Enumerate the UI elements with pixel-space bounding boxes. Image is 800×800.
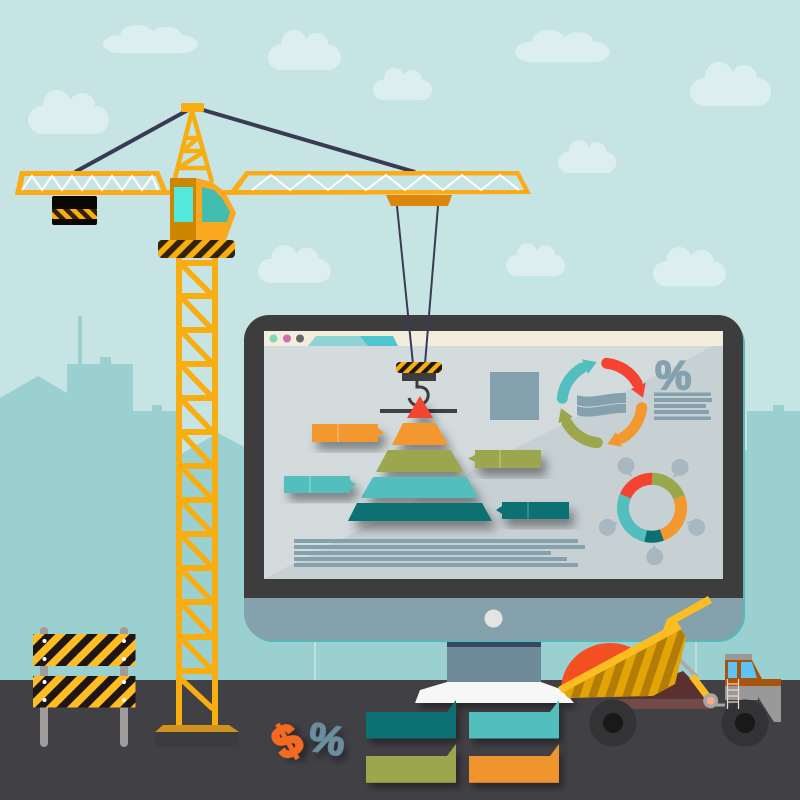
wave ribbons	[577, 393, 626, 417]
orange label	[312, 424, 384, 442]
ground	[0, 680, 800, 800]
crane platform	[158, 240, 235, 258]
dump bed	[563, 630, 686, 698]
hook block	[396, 362, 442, 405]
orange arrow	[607, 408, 642, 447]
crane support cables	[75, 110, 415, 172]
lifting bar	[380, 409, 457, 413]
donut chart	[623, 479, 681, 537]
crane mast	[176, 258, 218, 726]
screen	[264, 331, 723, 579]
teal card	[469, 700, 559, 738]
orange card	[469, 744, 559, 783]
clouds	[28, 25, 771, 286]
cab windows	[728, 662, 757, 678]
road barricade	[33, 627, 136, 747]
dark teal label	[496, 502, 569, 519]
olive card	[366, 744, 456, 783]
ladder	[727, 679, 739, 709]
browser tabs	[308, 336, 398, 346]
olive label	[468, 450, 541, 468]
dirt mound	[561, 643, 659, 690]
crane base	[155, 725, 239, 747]
thin light support lines	[315, 640, 696, 680]
hook trolley	[386, 195, 452, 206]
cab lower body	[725, 686, 781, 722]
pyramid chart	[348, 396, 492, 521]
dump truck	[558, 596, 781, 746]
teal arrow	[562, 359, 597, 398]
power button	[484, 610, 502, 628]
dollar sign: $	[263, 712, 311, 770]
speech bubbles	[599, 457, 705, 565]
browser title bar	[264, 331, 723, 346]
counterweight	[52, 196, 97, 225]
cab door window	[174, 187, 193, 222]
cab roof	[725, 654, 752, 660]
front wheel	[590, 700, 636, 746]
hydraulic arm	[680, 660, 725, 708]
window buttons	[270, 334, 304, 342]
rear wheel	[722, 700, 768, 746]
city skyline	[0, 316, 800, 680]
cab front window	[202, 187, 230, 222]
crane right jib	[220, 171, 531, 195]
red arrow	[607, 363, 646, 398]
percent text lines	[654, 392, 712, 420]
paragraph lines	[294, 539, 585, 567]
percent sign: %	[305, 713, 349, 765]
tower cap	[181, 103, 204, 112]
dark teal card	[366, 700, 456, 738]
monitor stand	[447, 640, 541, 682]
crane top tower	[175, 111, 212, 182]
screen highlight	[264, 346, 713, 579]
olive arrow	[558, 408, 597, 443]
crane hook cables	[397, 206, 438, 364]
percent heading: %	[655, 352, 691, 398]
cab upper	[725, 660, 781, 686]
cycle arrows	[558, 359, 646, 447]
monitor base	[415, 682, 574, 703]
bed rim	[558, 596, 712, 693]
image placeholder	[490, 372, 539, 420]
truck chassis	[613, 671, 710, 698]
crane cab	[170, 178, 236, 240]
monitor	[244, 315, 745, 642]
teal label	[284, 476, 356, 493]
crane left jib	[15, 171, 172, 195]
